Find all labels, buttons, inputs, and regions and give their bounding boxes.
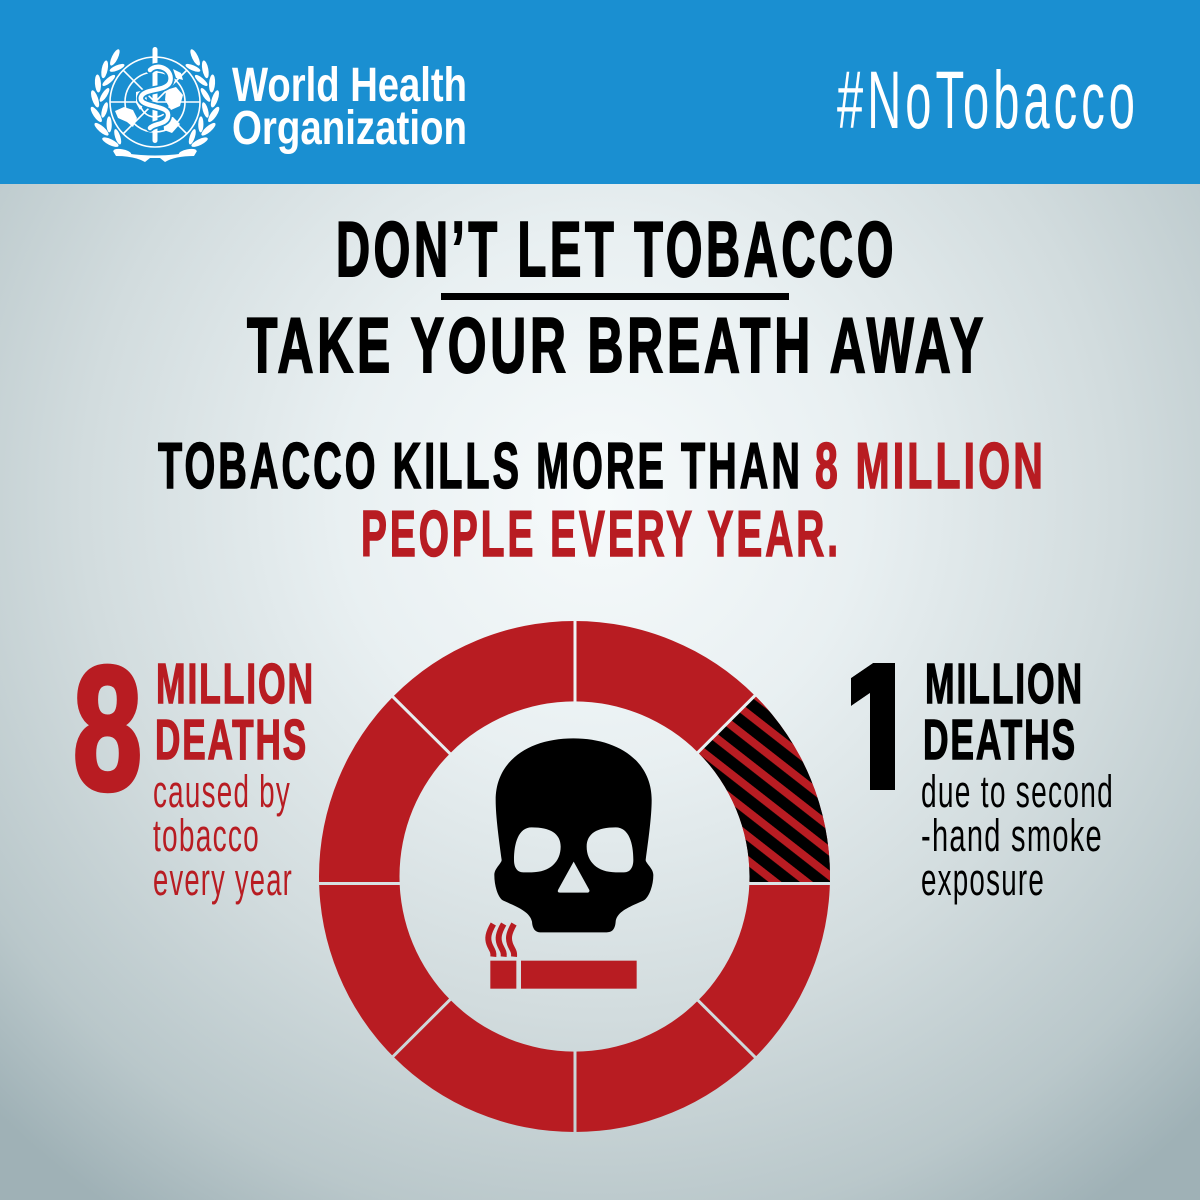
serpent bbox=[141, 67, 171, 128]
big number 1: 1 bbox=[842, 629, 908, 828]
body bbox=[521, 961, 637, 989]
heading: MILLION bbox=[156, 652, 315, 716]
icon: cigarette bbox=[488, 924, 637, 989]
description: caused by bbox=[153, 766, 291, 817]
continents bbox=[115, 69, 183, 133]
left statistic bbox=[73, 631, 315, 905]
heading: DEATHS bbox=[923, 708, 1077, 772]
heading bbox=[155, 652, 315, 772]
right laurel bbox=[178, 48, 221, 157]
organization name bbox=[232, 59, 467, 155]
big number 8: 8 bbox=[73, 631, 142, 827]
subtitle: 8 MILLION bbox=[815, 429, 1046, 502]
title bbox=[247, 205, 987, 389]
description bbox=[921, 766, 1114, 905]
globe rings and grid bbox=[110, 57, 200, 147]
description: -hand smoke bbox=[921, 810, 1103, 861]
heading bbox=[923, 652, 1084, 772]
description: tobacco bbox=[153, 810, 260, 861]
description bbox=[153, 766, 293, 905]
red ring segments bbox=[319, 621, 830, 1132]
right statistic bbox=[851, 662, 1111, 904]
staff bbox=[152, 47, 158, 143]
heading: DEATHS bbox=[155, 708, 308, 772]
striped segment: second-hand smoke bbox=[699, 696, 830, 882]
subtitle: PEOPLE EVERY YEAR. bbox=[361, 497, 841, 570]
icon: skull bbox=[494, 738, 653, 932]
organization name: World Health bbox=[232, 59, 467, 112]
subtitle: TOBACCO KILLS MORE THAN bbox=[158, 429, 803, 502]
header band bbox=[0, 0, 1200, 184]
description: exposure bbox=[921, 854, 1045, 905]
ribbon bbox=[113, 151, 197, 162]
donut chart bbox=[319, 621, 830, 1132]
filter bbox=[490, 961, 516, 989]
left laurel bbox=[89, 48, 132, 157]
subtitle bbox=[158, 429, 1046, 570]
description: every year bbox=[153, 854, 293, 905]
big number 1 bbox=[851, 663, 895, 790]
smoke bbox=[488, 924, 514, 957]
heading: MILLION bbox=[925, 652, 1084, 716]
organization name: Organization bbox=[232, 102, 467, 155]
WHO emblem bbox=[89, 47, 221, 162]
